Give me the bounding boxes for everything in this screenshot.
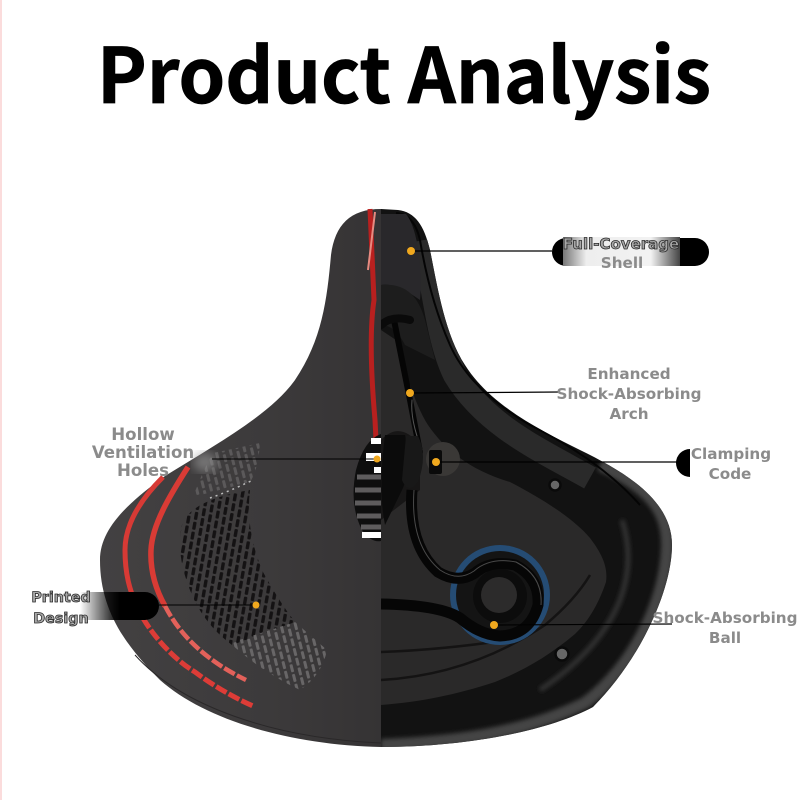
label: shock-absorbing ball: Shock-Absorbing bbox=[653, 609, 797, 627]
title: Product Analysis bbox=[97, 15, 711, 125]
leather upper band bbox=[424, 240, 590, 478]
base plate bbox=[381, 330, 606, 705]
label: clamping code bbox=[432, 445, 771, 483]
screws bbox=[550, 480, 568, 660]
label: hollow ventilation holes: Ventilation bbox=[92, 443, 194, 462]
label: clamping code: Clamping bbox=[691, 445, 771, 463]
arch spring wire bbox=[381, 318, 422, 452]
saddle left half: exterior cover bbox=[100, 209, 381, 747]
arch bridge bbox=[381, 285, 435, 360]
label: enhanced shock-absorbing arch bbox=[406, 365, 701, 423]
ventilation mesh bbox=[180, 443, 327, 690]
label: full-coverage shell: Shell bbox=[601, 254, 643, 272]
label: printed design: Design bbox=[33, 611, 89, 627]
saddle illustration bbox=[100, 205, 681, 750]
label: full-coverage shell: Full-Coverage bbox=[563, 235, 679, 253]
label: enhanced shock-absorbing arch: Enhanced bbox=[587, 365, 671, 383]
clamp bbox=[382, 435, 460, 525]
label: hollow ventilation holes: Holes bbox=[117, 461, 169, 480]
label: shock-absorbing ball: Ball bbox=[709, 629, 741, 647]
label: printed design: Printed bbox=[31, 590, 91, 606]
label: clamping code: Code bbox=[709, 465, 751, 483]
label: enhanced shock-absorbing arch: Arch bbox=[609, 405, 649, 423]
label: printed design bbox=[31, 590, 260, 627]
ventilation holes opening bbox=[354, 434, 381, 541]
label: full-coverage shell bbox=[407, 235, 709, 272]
nose shell bbox=[381, 214, 421, 300]
saddle right half: underside structure bbox=[381, 205, 681, 750]
label: hollow ventilation holes bbox=[92, 425, 380, 480]
dim channel highlight bbox=[540, 520, 628, 690]
label: hollow ventilation holes: Hollow bbox=[111, 425, 175, 444]
shock-absorbing ball bbox=[381, 490, 550, 645]
label: enhanced shock-absorbing arch: Shock-Absorbing bbox=[557, 385, 701, 403]
label: shock-absorbing ball bbox=[490, 609, 797, 647]
outer rim highlight bbox=[381, 465, 667, 745]
printed red stripes bbox=[125, 209, 376, 706]
